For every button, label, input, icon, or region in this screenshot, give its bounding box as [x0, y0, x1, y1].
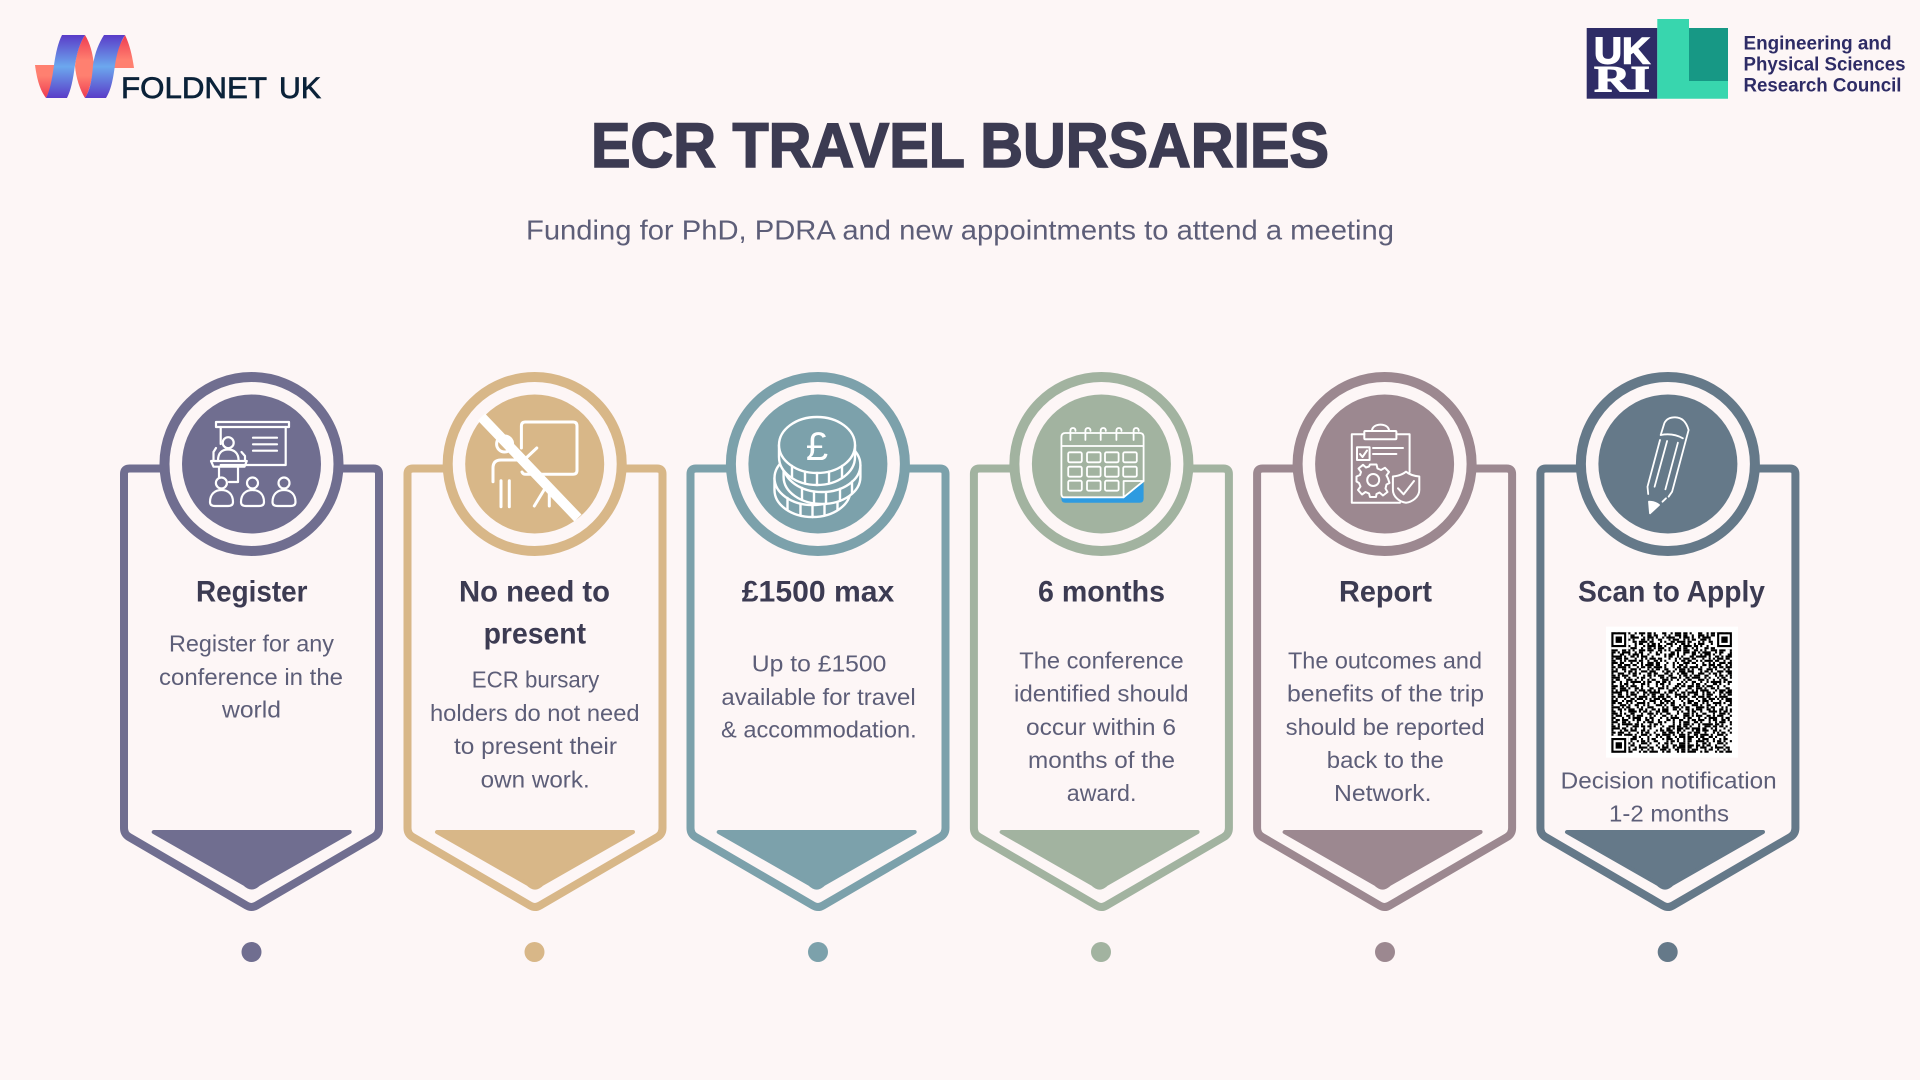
- logo wordmark: FOLDNET: [121, 72, 267, 105]
- body text: to present their: [454, 733, 617, 759]
- top coin: [779, 417, 855, 485]
- chevron: [719, 832, 915, 888]
- body text: The outcomes and: [1288, 648, 1482, 674]
- body text: months of the: [1028, 747, 1175, 773]
- heading: Report: [1339, 576, 1432, 609]
- dot: [1091, 942, 1111, 962]
- panel: 6 months: [974, 377, 1229, 962]
- body text: available for travel: [721, 684, 916, 710]
- calendar frame: [1061, 428, 1144, 497]
- panel: Report: [1257, 377, 1512, 962]
- dot: [808, 942, 828, 962]
- icon ring: [731, 377, 905, 551]
- body text: Up to £1500: [752, 651, 886, 677]
- dot: [1375, 942, 1395, 962]
- icon: presenter crossed out: [481, 417, 578, 518]
- icon: calendar: [1061, 428, 1144, 503]
- UKRI square: UK: [1594, 30, 1650, 72]
- body text: Network.: [1334, 780, 1432, 806]
- body text: conference in the: [159, 664, 343, 690]
- dot: [1658, 942, 1678, 962]
- body text: identified should: [1014, 681, 1189, 707]
- teal block: [1689, 28, 1728, 81]
- body text: [1014, 648, 1189, 806]
- dot: [524, 942, 544, 962]
- council name: Physical Sciences: [1744, 55, 1906, 76]
- body text: own work.: [481, 766, 590, 792]
- middle coin: [784, 438, 860, 504]
- chevron: [154, 832, 350, 888]
- heading: No need to: [459, 576, 610, 609]
- body text: occur within 6: [1026, 714, 1176, 740]
- body text: [721, 651, 917, 743]
- icon disc: [748, 394, 887, 534]
- council name: Research Council: [1744, 75, 1902, 96]
- logo wordmark: UK: [279, 72, 321, 105]
- body text: back to the: [1327, 747, 1444, 773]
- heading second line: present: [484, 617, 586, 650]
- heading: Scan to Apply: [1578, 576, 1765, 609]
- body text: [1286, 648, 1485, 806]
- icon disc: [182, 394, 321, 534]
- body text: benefits of the trip: [1287, 681, 1484, 707]
- body text: Register for any: [169, 631, 334, 657]
- body text: [1561, 767, 1777, 827]
- icon: presenter and audience: [210, 422, 296, 506]
- title: ECR TRAVEL BURSARIES: [591, 111, 1329, 181]
- icon disc: [1598, 394, 1737, 534]
- body text: world: [221, 697, 281, 723]
- icon ring: [448, 377, 622, 551]
- body text: 1-2 months: [1609, 801, 1729, 827]
- body text: holders do not need: [430, 700, 640, 726]
- body text: Decision notification: [1561, 767, 1777, 793]
- icon: pencil: [1648, 417, 1689, 513]
- icon disc: [1315, 394, 1454, 534]
- panel: Scan to Apply: [1540, 377, 1795, 962]
- pound sign: £: [806, 425, 828, 469]
- QR code: [1606, 627, 1738, 758]
- subtitle: Funding for PhD, PDRA and new appointments to attend a meeting: [526, 214, 1394, 245]
- body text: award.: [1067, 780, 1136, 806]
- card outline: [974, 468, 1229, 907]
- heading: Register: [196, 576, 308, 609]
- calendar curl: [1061, 481, 1144, 503]
- heading: £1500 max: [742, 576, 895, 609]
- icon ring: [1298, 377, 1472, 551]
- icon disc: [465, 394, 604, 534]
- icon ring: [164, 377, 338, 551]
- council name: Engineering and: [1744, 33, 1892, 54]
- chevron: [1285, 832, 1481, 888]
- panel: Register: [124, 377, 379, 962]
- green block: [1657, 19, 1728, 99]
- body text: The conference: [1019, 648, 1184, 674]
- body text: & accommodation.: [721, 717, 917, 743]
- heading: 6 months: [1038, 576, 1165, 609]
- body text: [159, 631, 343, 723]
- logo: UKRI EPSRC: [1587, 19, 1906, 101]
- logo ribbon: [35, 35, 134, 98]
- card outline: [690, 468, 946, 907]
- chevron: [437, 832, 633, 888]
- body text: ECR bursary: [472, 667, 600, 693]
- card outline: [124, 468, 379, 907]
- icon disc: [1032, 394, 1171, 534]
- card outline: [1257, 468, 1512, 907]
- card outline: [408, 468, 662, 907]
- bottom coin: [774, 451, 850, 517]
- UKRI square: [1587, 28, 1657, 101]
- logo: FoldNet UK: [35, 35, 321, 105]
- UKRI square: RI: [1594, 60, 1650, 101]
- panel: No need to present: [408, 377, 662, 962]
- icon ring: [1014, 377, 1188, 551]
- chevron: [1002, 832, 1198, 888]
- chevron: [1567, 832, 1763, 888]
- council name: [1744, 33, 1906, 96]
- body text: [430, 667, 640, 792]
- card outline: [1540, 468, 1795, 907]
- dot: [242, 942, 262, 962]
- icon ring: [1581, 377, 1755, 551]
- icon: clipboard with gear and shield: [1352, 425, 1419, 503]
- body text: should be reported: [1286, 714, 1485, 740]
- panel: £1500 max: [690, 377, 946, 962]
- icon: pound coins: [774, 417, 860, 517]
